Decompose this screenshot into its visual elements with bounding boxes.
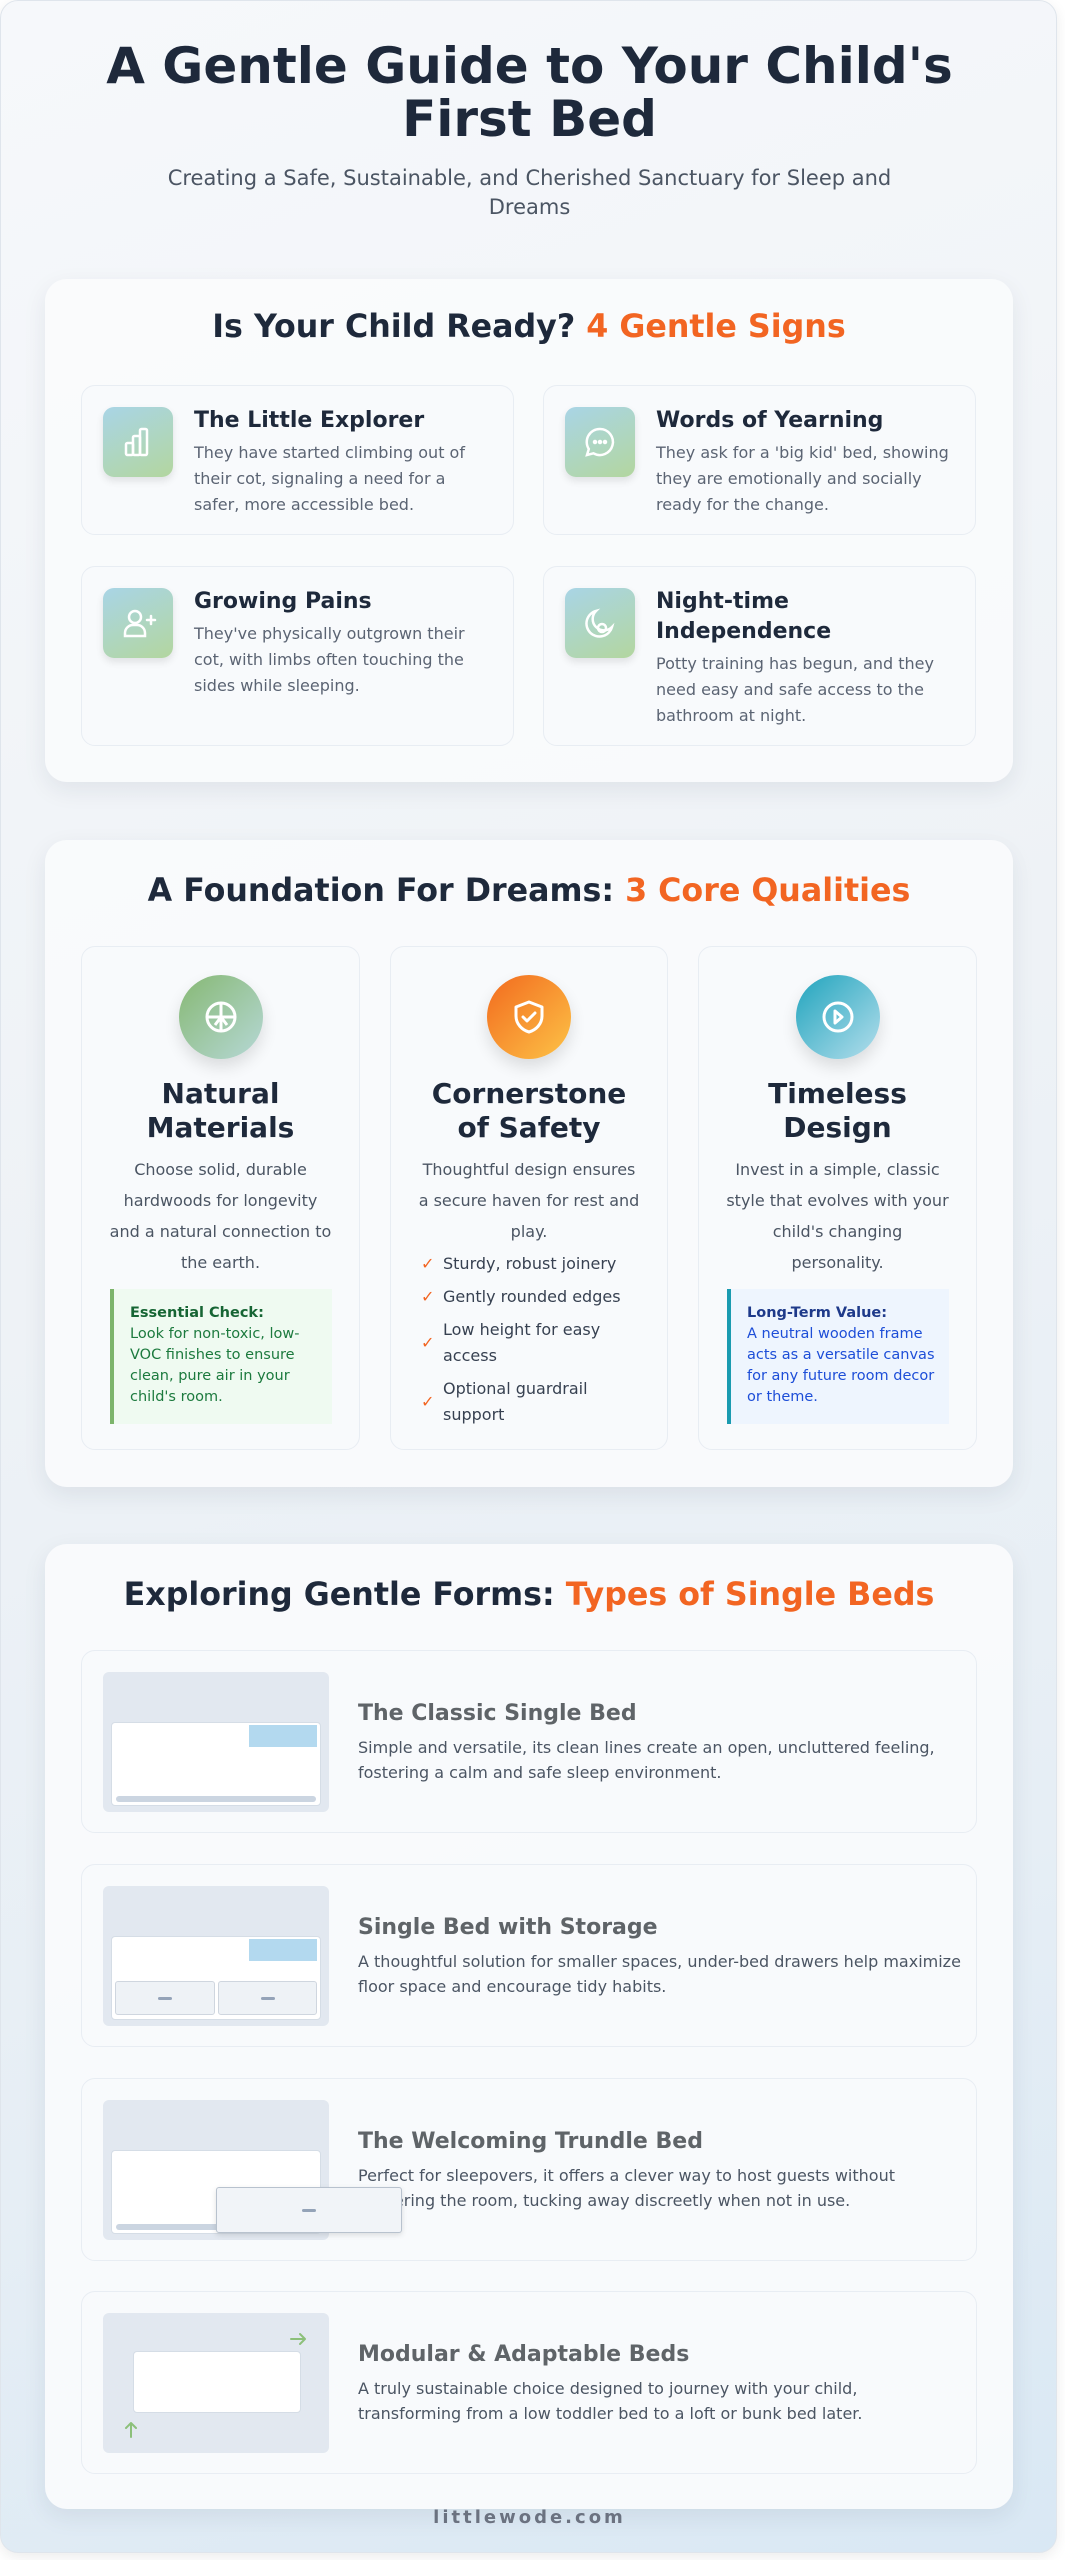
bed type: trundle bbox=[81, 2078, 977, 2261]
bed type: storage: A thoughtful solution for smaller spaces, under-bed drawers help maximize floor space and encourage tidy habits. bbox=[358, 1952, 961, 1996]
quality: safety: Cornerstone bbox=[432, 1077, 626, 1110]
checklist: safety features: Gently rounded edges bbox=[443, 1287, 621, 1306]
quality: natural materials: Materials bbox=[147, 1111, 294, 1144]
quality: timeless design: Invest in a simple, classic style that evolves with your child's changing bbox=[726, 1160, 949, 1241]
bed type: storage: Single Bed with Storage bbox=[358, 1915, 658, 1940]
quality: timeless design: Design bbox=[783, 1111, 892, 1144]
bed type: modular: A truly sustainable choice designed to journey with your child, transforming from a low toddler bed to a loft or bunk bed later. bbox=[358, 2379, 862, 2423]
callout: essential check: Look for non-toxic, low-VOC finishes to ensure clean, pure air in your child's room. bbox=[130, 1326, 300, 1405]
sign: growing pains: They've physically outgrown their cot, with limbs often touching the sides while sleeping. bbox=[194, 624, 465, 695]
bed type: modular: Modular & Adaptable Beds bbox=[358, 2342, 689, 2367]
callout: long-term value: Long-Term Value: bbox=[747, 1305, 887, 1321]
heading: types of single beds: Exploring Gentle Forms: Types of Single Beds bbox=[124, 1577, 934, 1613]
title bbox=[106, 37, 953, 148]
sign: night-time independence: Night-time bbox=[656, 589, 789, 614]
callout: long-term value: A neutral wooden frame acts as a versatile canvas for any future room decor or theme. bbox=[747, 1326, 934, 1405]
title: A Gentle Guide to Your Child's bbox=[106, 37, 953, 95]
illustration: trundle bed bbox=[103, 2100, 329, 2240]
icon: bar chart bbox=[103, 407, 173, 477]
bed type: classic: The Classic Single Bed bbox=[358, 1701, 637, 1726]
sign: night-time independence: Independence bbox=[656, 619, 831, 644]
bed type: classic: Simple and versatile, its clean lines create an open, uncluttered feeling, fostering a calm and safe sleep environment. bbox=[358, 1738, 935, 1782]
sign: words of yearning: They ask for a 'big kid' bed, showing they are emotionally and socially ready for the change. bbox=[656, 443, 949, 514]
checklist: safety features: ✓ bbox=[421, 1392, 434, 1411]
sign: growing pains bbox=[81, 566, 514, 746]
icon: play circle bbox=[796, 975, 880, 1059]
sign: growing pains: Growing Pains bbox=[194, 589, 372, 614]
quality: natural materials: Natural bbox=[162, 1077, 279, 1110]
sign: little explorer bbox=[81, 385, 514, 535]
callout: essential check: Essential Check: bbox=[130, 1305, 264, 1321]
icon: person plus bbox=[103, 588, 173, 658]
panel: core qualities bbox=[45, 840, 1013, 1487]
checklist: safety features: ✓ bbox=[421, 1254, 434, 1273]
callout: long-term value bbox=[727, 1289, 949, 1424]
icon: globe bbox=[178, 975, 262, 1059]
icon: moon bbox=[565, 588, 635, 658]
quality: safety: Thoughtful design ensures a secure haven for rest and play. bbox=[419, 1160, 639, 1241]
sign: words of yearning bbox=[543, 385, 976, 535]
icon: shield bbox=[487, 975, 571, 1059]
bed type: storage bbox=[81, 1864, 977, 2047]
checklist: safety features bbox=[421, 1254, 621, 1424]
bed type: classic bbox=[81, 1650, 977, 1833]
panel: bed types bbox=[45, 1544, 1013, 2509]
callout: essential check bbox=[110, 1289, 332, 1424]
illustration: storage bed bbox=[103, 1886, 329, 2026]
bed type: modular bbox=[81, 2291, 977, 2474]
sign: little explorer: They have started climbing out of their cot, signaling a need for a safer, more accessible bed. bbox=[194, 443, 465, 514]
quality: timeless design bbox=[698, 946, 977, 1450]
checklist: safety features: Low height for easy access bbox=[443, 1320, 600, 1365]
quality: natural materials bbox=[81, 946, 360, 1450]
heading: 4 gentle signs: Is Your Child Ready? 4 Gentle Signs bbox=[212, 309, 846, 345]
subtitle: Creating a Safe, Sustainable, and Cherished Sanctuary for Sleep and Dreams bbox=[168, 166, 891, 219]
checklist: safety features: Sturdy, robust joinery bbox=[443, 1254, 616, 1273]
quality: natural materials: Choose solid, durable hardwoods for longevity and a natural connection to the earth. bbox=[110, 1160, 331, 1272]
panel: readiness signs bbox=[45, 279, 1013, 782]
icon: speech bubble bbox=[565, 407, 635, 477]
bed type: trundle: Perfect for sleepovers, it offers a clever way to host guests without cluttering the room, tucking away discreetly when not in use. bbox=[358, 2166, 895, 2210]
footer: littlewode.com bbox=[433, 2507, 626, 2528]
title: First Bed bbox=[402, 90, 657, 148]
quality: safety bbox=[390, 946, 668, 1450]
sign: little explorer: The Little Explorer bbox=[194, 408, 424, 433]
illustration: modular bed bbox=[103, 2313, 329, 2453]
sign: night-time independence: Potty training has begun, and they need easy and safe access to the bathroom at night. bbox=[656, 654, 934, 725]
quality: safety: of Safety bbox=[457, 1111, 601, 1144]
sign: night-time independence bbox=[543, 566, 976, 746]
icon: arrows bbox=[125, 2333, 306, 2438]
heading: 3 core qualities: A Foundation For Dreams: 3 Core Qualities bbox=[148, 873, 910, 909]
quality: timeless design: personality. bbox=[791, 1253, 884, 1272]
illustration: classic bed bbox=[103, 1672, 329, 1812]
quality: timeless design: Timeless bbox=[768, 1077, 907, 1110]
bed type: trundle: The Welcoming Trundle Bed bbox=[358, 2129, 703, 2154]
sign: words of yearning: Words of Yearning bbox=[656, 408, 883, 433]
checklist: safety features: ✓ bbox=[421, 1333, 434, 1352]
checklist: safety features: Optional guardrail support bbox=[443, 1379, 588, 1424]
checklist: safety features: ✓ bbox=[421, 1287, 434, 1306]
